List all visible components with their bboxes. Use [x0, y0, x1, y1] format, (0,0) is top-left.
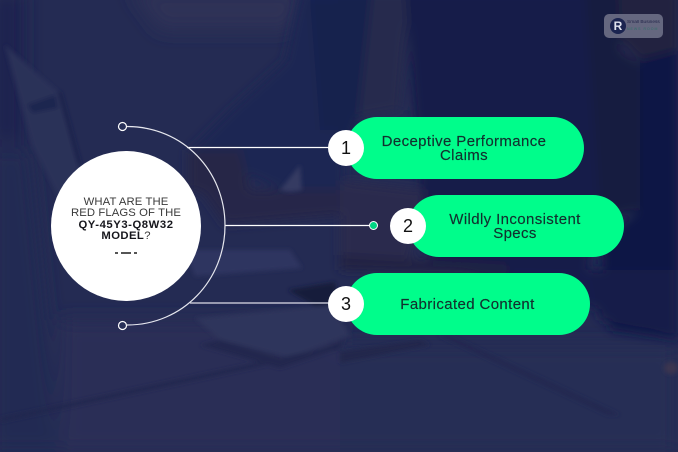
question text: MODEL?: [101, 230, 151, 242]
question text: RED FLAGS OF THE: [71, 207, 181, 219]
number badge 3: 3: [341, 294, 351, 314]
hair and far right: [585, 0, 660, 220]
logo badge: [604, 14, 663, 38]
pill 2 text: Wildly Inconsistent: [449, 211, 581, 228]
number badge 2: [390, 208, 426, 244]
number badge 3: [328, 286, 364, 322]
question text: [71, 196, 181, 242]
dark arm lower right: [340, 255, 510, 275]
bright cuff: [280, 165, 302, 192]
number badge 1: [328, 130, 364, 166]
question text: WHAT ARE THE: [84, 196, 168, 208]
pill 1 text: Deceptive Performance: [382, 133, 546, 150]
pill 1 text: [382, 133, 546, 164]
logo icon: R: [614, 19, 622, 33]
pill 3: [346, 273, 590, 335]
logo text: Small Business: [627, 20, 660, 25]
hands: [188, 150, 250, 195]
pill 2 text: Specs: [493, 225, 537, 242]
pill 1 text: Claims: [440, 147, 488, 164]
number badge 2: 2: [403, 216, 413, 236]
laptop keyboard on desk: [185, 250, 302, 276]
paper fold line: [438, 335, 620, 415]
logo text: [627, 20, 660, 31]
logo text: NEWS ROOM: [627, 27, 658, 31]
question text: QY-45Y3-Q8W32: [78, 219, 174, 231]
number badge 1: 1: [341, 138, 351, 158]
shirt of left person: [190, 0, 345, 190]
pill 1: [346, 117, 584, 179]
pill 2: [408, 195, 624, 257]
logo icon: [610, 18, 626, 34]
pill 2 text: [449, 211, 581, 242]
jacket: [405, 0, 600, 290]
desk edge: [0, 345, 340, 422]
laptop screen: [5, 45, 80, 200]
pill 3 text: Fabricated Content: [400, 296, 535, 313]
phone on desk: [288, 282, 340, 312]
small dash ornament: [115, 252, 137, 254]
external keyboard: [195, 305, 350, 358]
warm strip behind: [345, 0, 410, 120]
object far right: [664, 362, 678, 374]
central circle: question: [51, 151, 201, 301]
